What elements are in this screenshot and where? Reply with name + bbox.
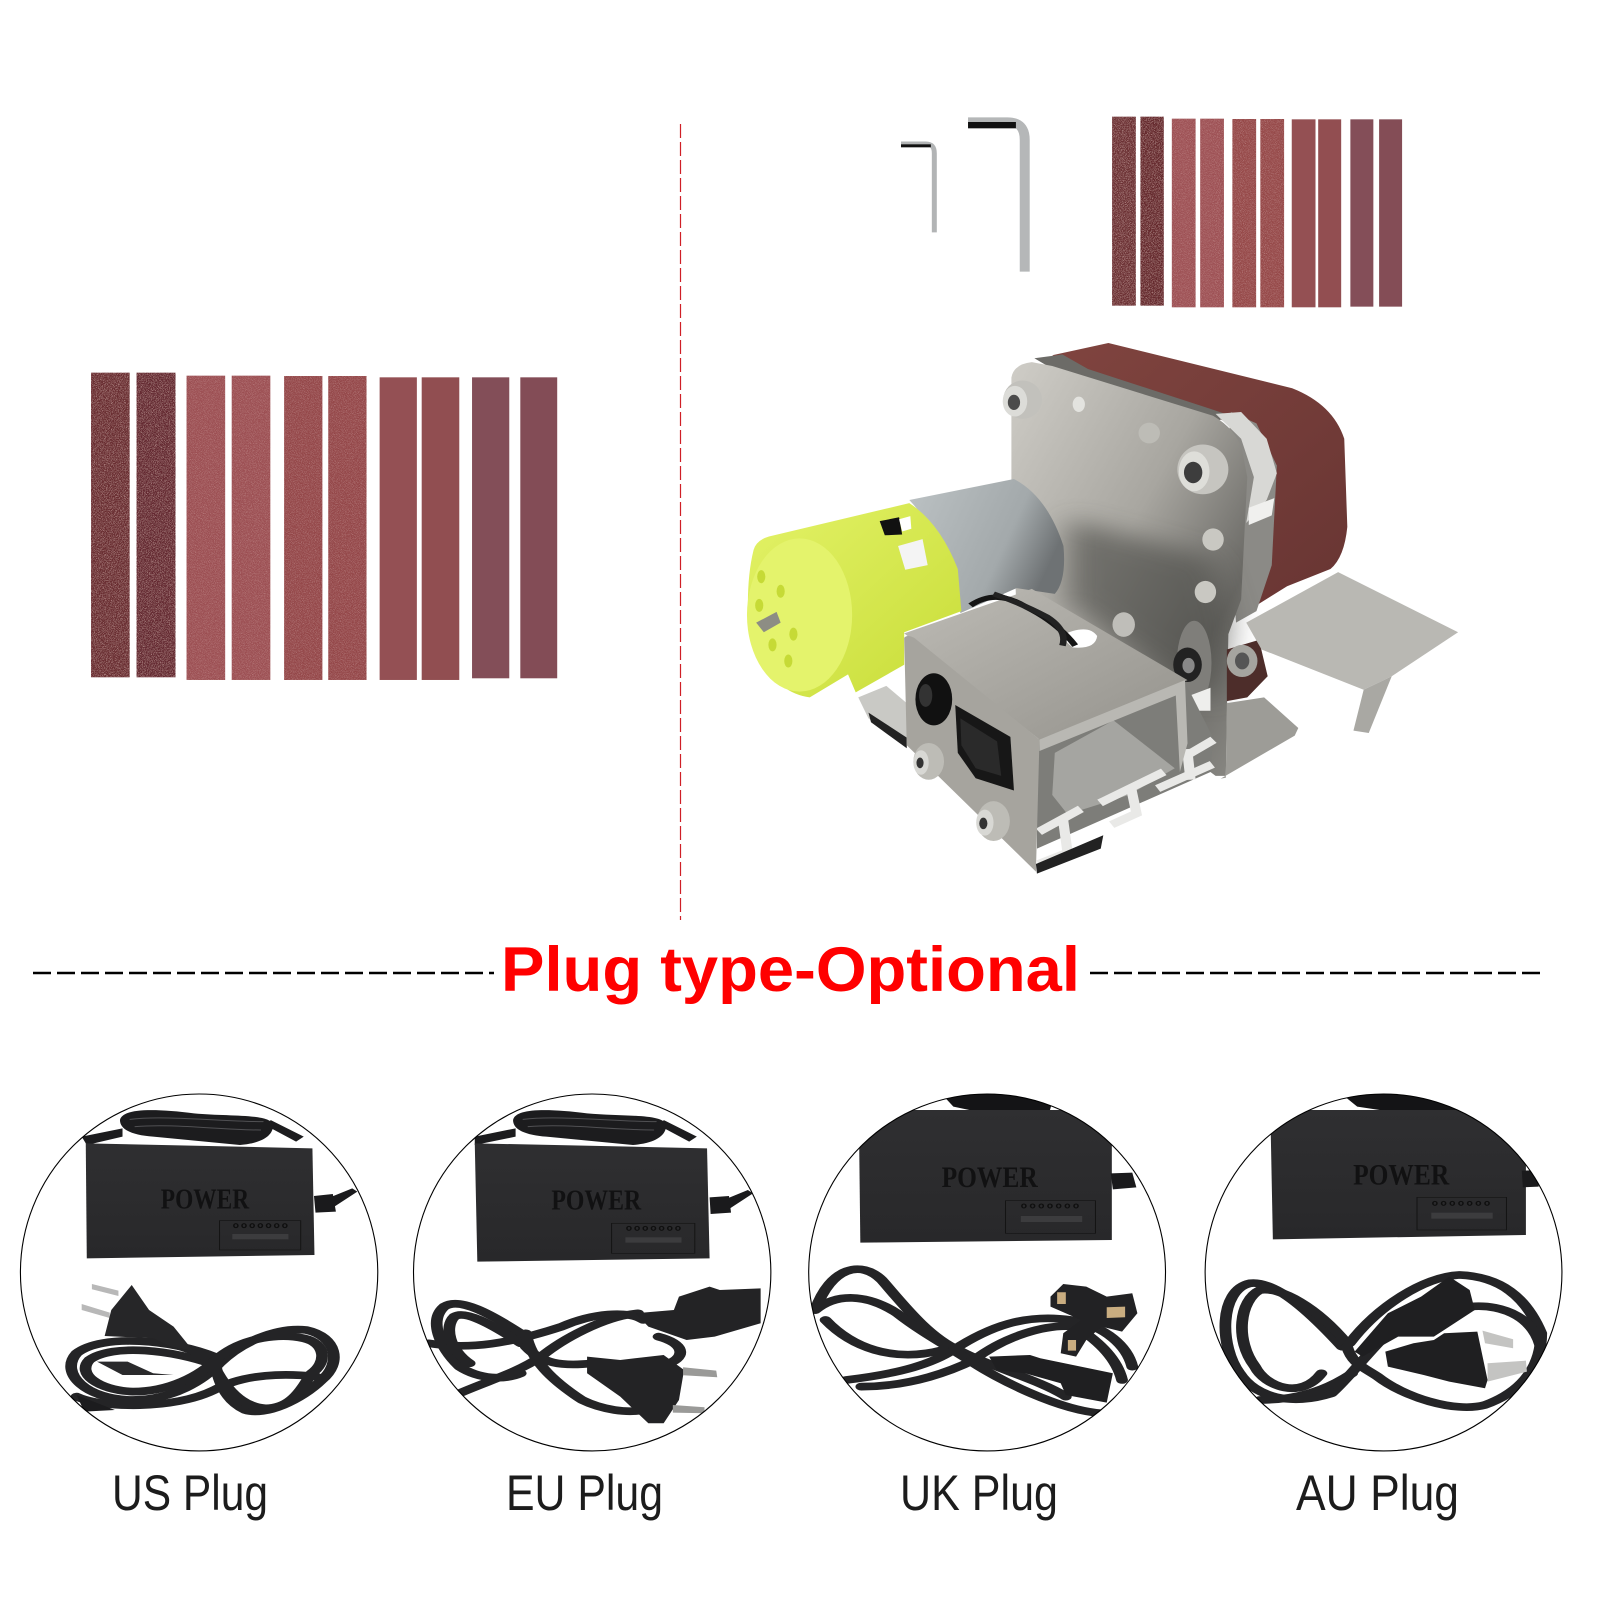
belt rail (1034, 354, 1231, 422)
panel: EU plug (414, 1094, 771, 1451)
belt lower drum (1227, 640, 1268, 701)
UK plug body (1050, 1284, 1137, 1357)
plate screws (1003, 381, 1228, 637)
adapter output boot (1111, 1173, 1136, 1189)
motor can (909, 479, 1064, 613)
IEC connector (636, 1287, 761, 1340)
adapter output boot (314, 1188, 357, 1213)
adapter brand: POWER (1353, 1159, 1450, 1192)
UK plug pins (1057, 1292, 1125, 1351)
AU power cord (1225, 1275, 1541, 1407)
adapter cord coil (82, 1110, 304, 1145)
aluminium interior (1037, 682, 1213, 849)
aluminium profile end (1043, 742, 1209, 862)
aluminium profile channel (1052, 720, 1175, 814)
adapter cord coil (1346, 1094, 1456, 1110)
UK power cord (815, 1269, 1132, 1413)
US power cord (71, 1330, 334, 1412)
sanding belt (1052, 343, 1347, 605)
adapter rating box (612, 1223, 695, 1253)
US lens outline (20, 1094, 378, 1451)
EU plug body (587, 1355, 684, 1423)
chrome clip (1249, 498, 1274, 525)
sanding strips: left set (91, 373, 557, 680)
US plug pins (82, 1284, 118, 1318)
cap face holes (755, 570, 798, 667)
box screws (913, 743, 1010, 841)
backing plate (1011, 362, 1247, 776)
section dashed rule left (33, 972, 494, 974)
power adapter (1270, 1110, 1526, 1239)
box side panel (904, 636, 1039, 872)
adapter brand: POWER (551, 1185, 642, 1216)
sanding strips: accessory set (1112, 117, 1402, 307)
panel: AU plug (1205, 1090, 1562, 1451)
IEC connector (989, 1355, 1113, 1403)
UK lens outline (809, 1094, 1166, 1451)
adapter brand: POWER (942, 1162, 1038, 1194)
icon: large hex key (968, 122, 1025, 272)
box slot (1060, 629, 1097, 648)
plate shadow (1068, 519, 1231, 703)
adapter cord coil (946, 1094, 1051, 1110)
label: AU Plug: AU Plug (1296, 1465, 1459, 1521)
motor wire (971, 597, 1075, 646)
work rest (1246, 572, 1458, 690)
motor shaft (756, 612, 781, 632)
motor wire second strand (994, 594, 1063, 646)
power adapter (86, 1143, 314, 1258)
adapter cord coil (475, 1110, 697, 1145)
adapter rating box (220, 1221, 301, 1250)
chrome roller highlight (1216, 412, 1277, 523)
adapter output boot (1522, 1170, 1539, 1187)
rubber foot rear (868, 713, 907, 748)
AU lens outline (1205, 1094, 1562, 1451)
belt sander product (747, 343, 1458, 874)
EU plug pins (673, 1367, 717, 1413)
rubber foot front (1036, 835, 1103, 874)
lime motor cap (748, 503, 961, 697)
label: US Plug: US Plug (112, 1465, 268, 1521)
panel: US plug (20, 1094, 378, 1451)
adapter rating box (1006, 1201, 1095, 1233)
power adapter (475, 1143, 710, 1262)
roller column (1226, 412, 1277, 623)
adapter output boot (710, 1190, 753, 1214)
adapter rating box (1417, 1197, 1506, 1230)
EU lens outline (414, 1094, 771, 1451)
AU plug pins (1482, 1331, 1527, 1382)
label: UK Plug: UK Plug (900, 1465, 1058, 1521)
rocker switch (955, 705, 1014, 790)
power adapter (859, 1110, 1112, 1243)
box front edge (1039, 680, 1188, 772)
box top panel (904, 589, 1188, 739)
cap windows (880, 516, 928, 570)
cable grommet (915, 673, 952, 725)
cap face (747, 538, 852, 692)
label: EU Plug: EU Plug (506, 1465, 663, 1521)
panel: UK plug (809, 1090, 1166, 1451)
adapter brand: POWER (161, 1184, 250, 1215)
section dashed rule right (1090, 972, 1540, 974)
slot and knob (1173, 621, 1257, 711)
coil highlights (523, 1118, 656, 1130)
EU power cord (429, 1304, 680, 1411)
AU plug body (1385, 1332, 1488, 1388)
vertical red dashed divider (680, 124, 682, 920)
IEC connector (1355, 1277, 1475, 1357)
work rest flange (1353, 676, 1392, 733)
icon: small hex key (901, 144, 934, 232)
title: Plug type-Optional (501, 935, 1080, 1005)
rear bracket (858, 686, 907, 747)
US plug body (104, 1285, 188, 1344)
coil highlights (130, 1118, 263, 1130)
base plate (1221, 697, 1298, 779)
